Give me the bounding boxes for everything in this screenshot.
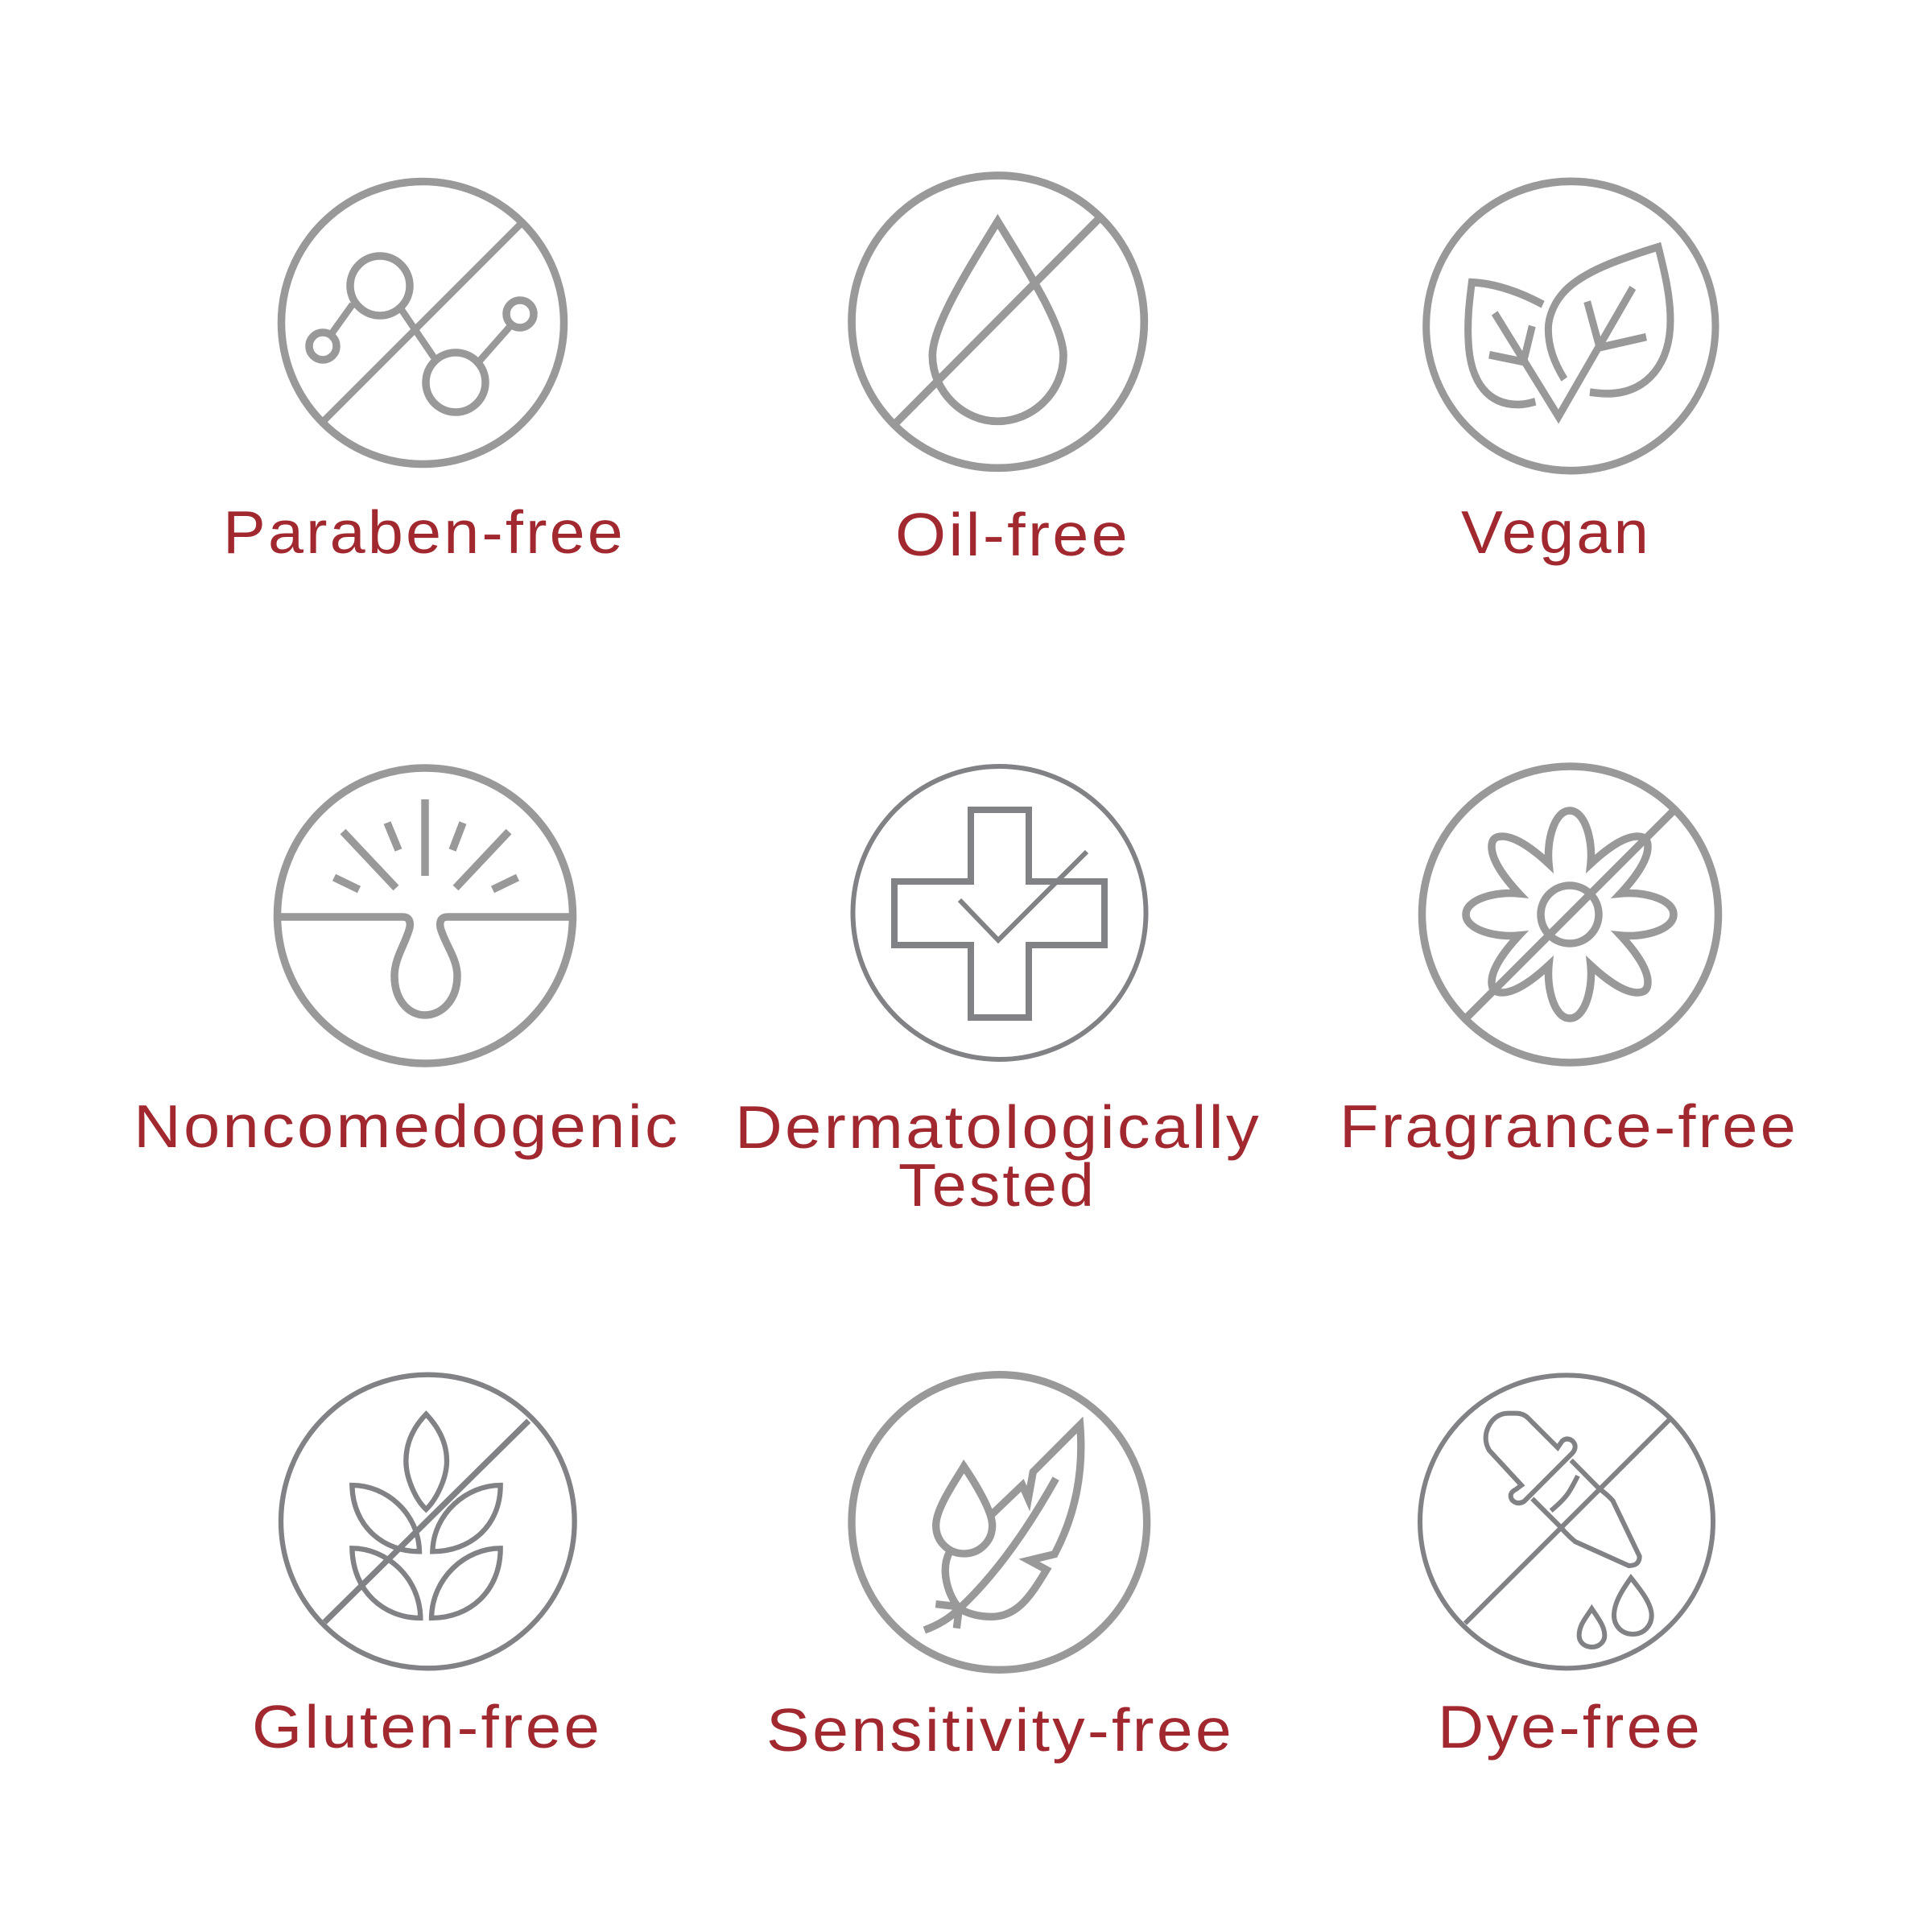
panel: vegan xyxy=(1426,181,1715,566)
icon: medical cross with check xyxy=(853,766,1146,1059)
panel: fragrance-free xyxy=(1340,766,1798,1160)
icon: oil drop with slash xyxy=(852,175,1144,468)
icon: dropper with slash xyxy=(1420,1375,1713,1668)
panel: noncomedogenic xyxy=(134,768,680,1160)
label: noncomedogenic: Noncomedogenic xyxy=(134,1092,680,1160)
panel: paraben-free xyxy=(223,182,625,566)
label: vegan: Vegan xyxy=(1461,498,1651,566)
label: dye-free: Dye-free xyxy=(1438,1693,1703,1761)
label: fragrance-free: Fragrance-free xyxy=(1340,1092,1798,1160)
panel: dye-free xyxy=(1420,1375,1713,1761)
label: sensitivity-free: Sensitivity-free xyxy=(766,1696,1234,1764)
label: dermatologically tested: Dermatologically xyxy=(735,1093,1261,1161)
label: gluten-free: Gluten-free xyxy=(252,1693,602,1761)
icon: two leaves xyxy=(1426,181,1715,471)
label: paraben-free: Paraben-free xyxy=(223,498,625,566)
panel: oil-free xyxy=(852,175,1144,568)
panel: gluten-free xyxy=(252,1375,602,1761)
icon: molecule with slash xyxy=(282,182,564,464)
panel: dermatologically tested xyxy=(735,766,1261,1219)
panel: sensitivity-free xyxy=(766,1375,1234,1764)
icon: feather and drop xyxy=(852,1375,1147,1670)
icon: wheat with slash xyxy=(281,1375,575,1668)
label: oil-free: Oil-free xyxy=(895,501,1130,568)
icon: skin pore with rays xyxy=(275,768,575,1063)
icon: flower with slash xyxy=(1422,766,1718,1063)
label: dermatologically tested xyxy=(735,1093,1261,1219)
label: dermatologically tested: Tested xyxy=(898,1151,1096,1219)
